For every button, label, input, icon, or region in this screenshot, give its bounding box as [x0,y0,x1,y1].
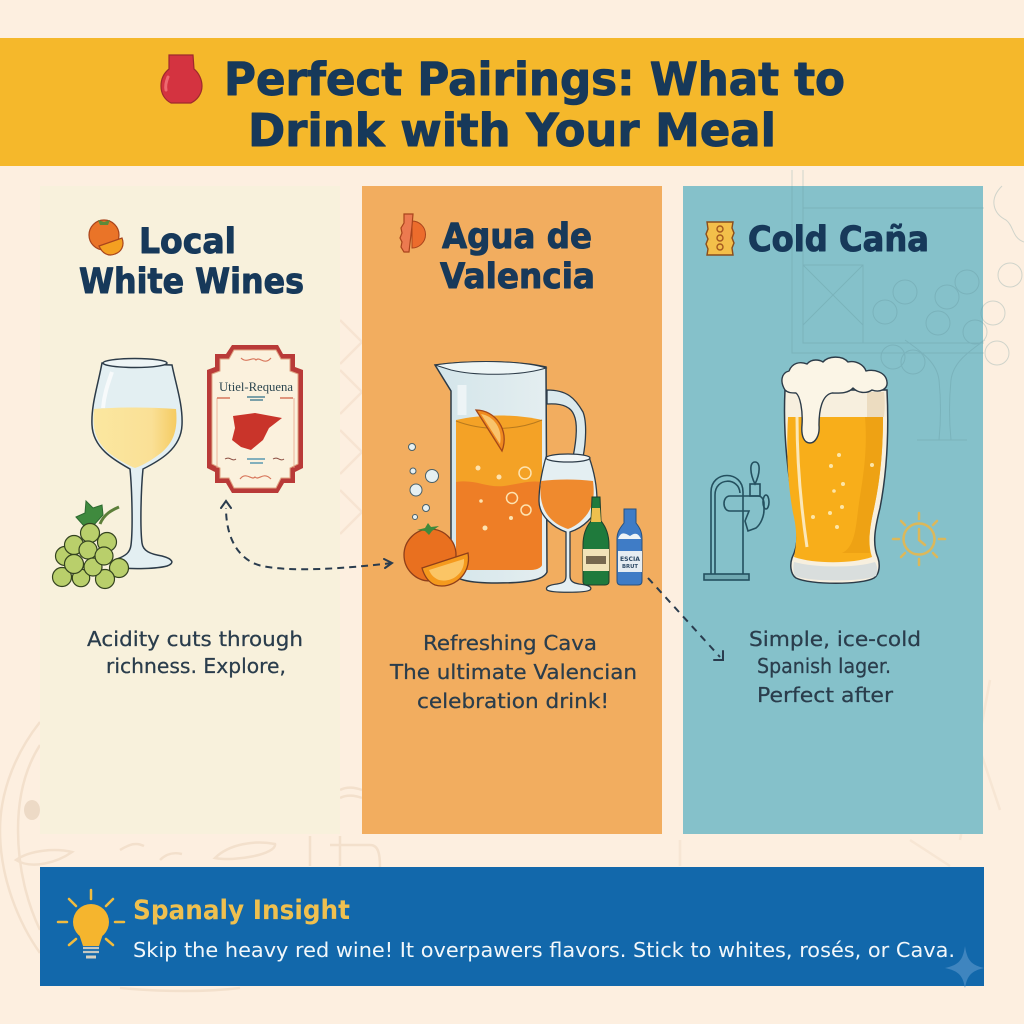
icon: wine glass [92,358,182,569]
decorative tree and tiles [792,170,1024,440]
icon: light bulb [58,890,124,957]
icon: bubbles [408,444,438,520]
icon: grapes [52,501,128,588]
heading [79,222,304,302]
arrow: to label [221,501,392,569]
heading: Agua de [442,217,592,257]
icon: orange with slice [404,523,469,586]
icon: beer glass with foam [782,357,888,583]
text block: Perfect after [757,683,894,707]
text block: richness. Explore, [106,654,286,678]
heading: White Wines [79,262,304,302]
heading [440,217,595,297]
icon: blue bottle: BRUT [622,564,639,570]
heading: Local [139,222,236,262]
title text: Perfect Pairings: What to [224,53,845,106]
arrow: to caña panel [648,578,723,660]
text block: celebration drink! [417,689,609,713]
icon: blue bottle: ESCIA [620,556,640,563]
title text: Drink with Your Meal [248,104,776,157]
icon: sun clock [893,513,945,565]
icon: red jug [161,55,202,103]
insight heading: Spanaly Insight [133,895,350,926]
insight text: Skip the heavy red wine! It overpawers flavors. Stick to whites, rosés, or Cava. [133,938,955,962]
icon: beer tap [704,462,769,580]
icon: Utiel-Requena label [207,345,303,493]
icon: orange slice and peel [400,214,426,252]
text block: The ultimate Valencian [389,660,637,684]
icon: sparkle [945,946,984,988]
icon: Utiel-Requena label: Utiel-Requena [219,379,293,394]
background line pattern [0,320,1000,991]
text block [87,627,303,678]
text block: Acidity cuts through [87,627,303,651]
text block: Spanish lager. [757,654,891,678]
icon: orange [89,220,123,255]
icon: blue bottle [617,509,642,585]
icon: cava bottle [583,497,609,585]
panel: cold caña [683,170,1024,834]
panel: agua de valencia [362,186,662,834]
insight bar [40,867,984,988]
title text [224,53,845,157]
text block: Simple, ice-cold [749,627,921,651]
title banner [0,38,1024,166]
icon: wine glass with spritz [539,454,597,592]
icon: yellow pastry [706,222,734,255]
text block [749,627,921,707]
heading: Cold Caña [748,220,929,260]
icon: pitcher [435,362,586,583]
text block [389,631,637,713]
heading: Valencia [440,257,595,297]
text block: Refreshing Cava [423,631,597,655]
panel: local white wines [40,186,340,834]
